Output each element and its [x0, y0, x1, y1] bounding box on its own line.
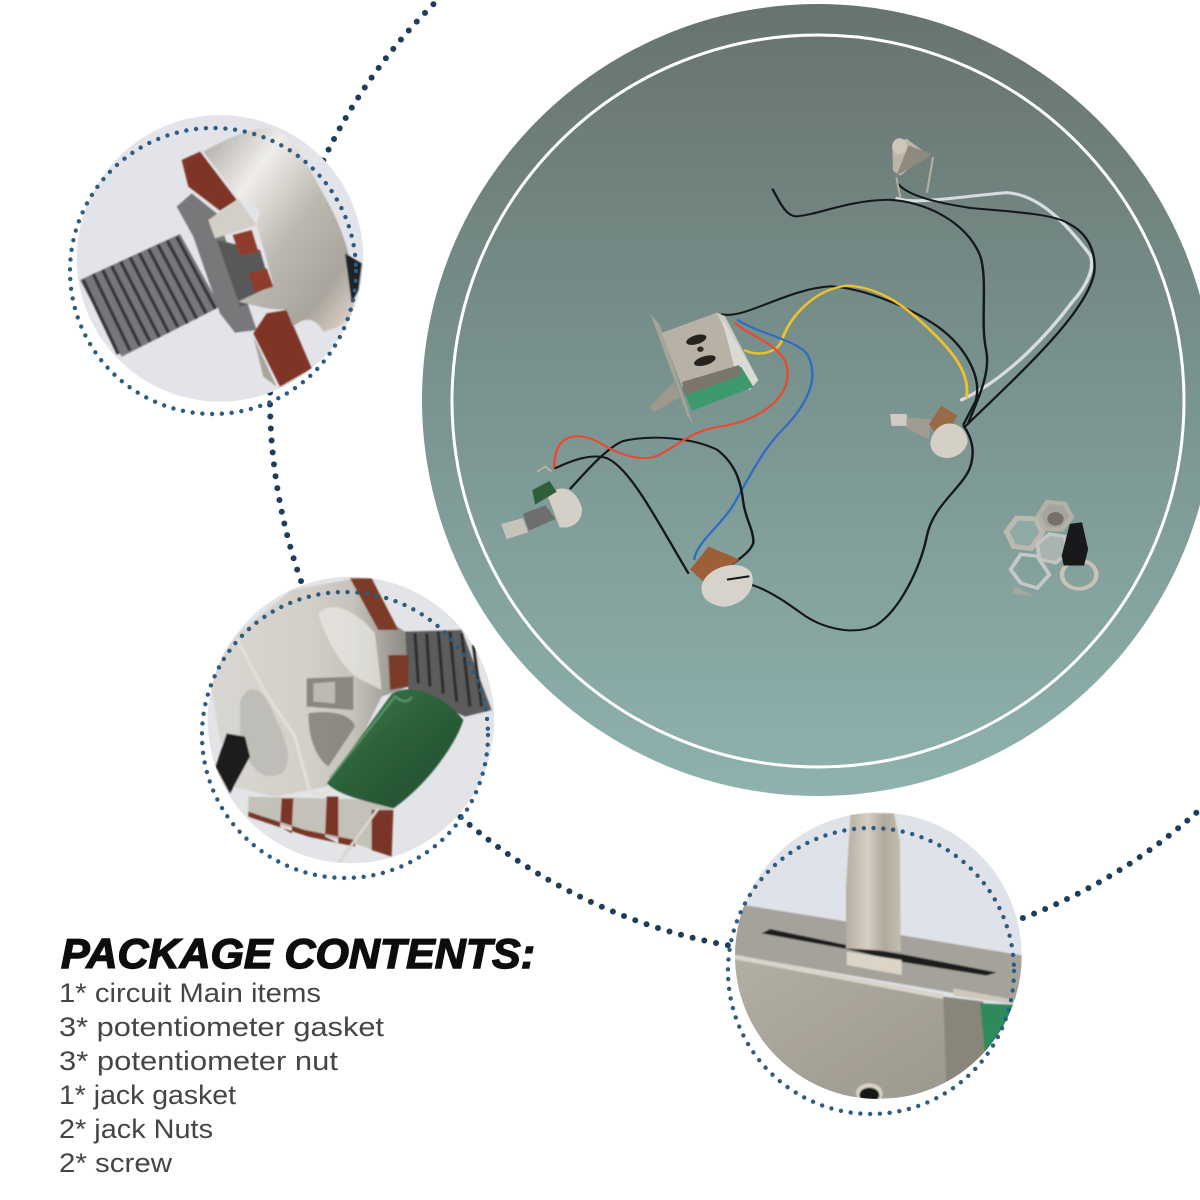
- package contents list: 2* screw: [59, 1148, 173, 1178]
- dotted circle 1: [70, 128, 356, 414]
- dotted circle 3: [728, 828, 1014, 1114]
- switch box face: [733, 955, 950, 1098]
- lead wire: [237, 638, 330, 794]
- icon: tone potentiometer with capacitor: [501, 466, 582, 539]
- main product photo: wiring harness: [501, 138, 1096, 630]
- potentiometer silver can: [203, 128, 355, 332]
- detail photo 3: switch lever: [728, 812, 1023, 1114]
- main product circle: [422, 4, 1200, 796]
- green capacitor: [327, 689, 463, 808]
- potentiometer hex nut: [177, 193, 257, 333]
- icon: output potentiometer: [890, 406, 968, 458]
- icon: volume potentiometer: [690, 547, 753, 607]
- icon: hardware nuts, washers and knob: [1007, 502, 1096, 597]
- potentiometer threaded shaft: [80, 234, 220, 357]
- package contents list: 3* potentiometer gasket: [59, 1012, 385, 1042]
- package contents list: 1* jack gasket: [59, 1080, 237, 1110]
- wires: [554, 184, 1095, 630]
- switch mounting hole: [855, 1082, 884, 1099]
- dotted circle 2: [202, 592, 488, 878]
- package contents list: 3* potentiometer nut: [59, 1046, 339, 1076]
- potentiometer clamp tab: [208, 199, 257, 238]
- capacitor lower terminals: [248, 797, 392, 857]
- switch top plate: [733, 903, 1023, 1005]
- icon: output jack: [892, 138, 933, 198]
- package contents list: 2* jack Nuts: [59, 1114, 213, 1144]
- heading: PACKAGE CONTENTS:: [61, 930, 535, 977]
- potentiometer upper board: [182, 152, 237, 211]
- potentiometer slot: [307, 677, 353, 710]
- detail photo 2: potentiometer and capacitor: [202, 577, 494, 878]
- package contents list: [59, 978, 385, 1178]
- capacitor thread shaft: [405, 630, 492, 717]
- detail photo 1: potentiometer shaft: [70, 115, 363, 414]
- potentiometer lower board: [253, 310, 312, 387]
- solder blob: [240, 689, 288, 776]
- connecting dotted ring: [270, 0, 1200, 954]
- switch lever: [846, 813, 901, 952]
- potentiometer body: [208, 578, 408, 797]
- package contents list: 1* circuit Main items: [59, 978, 321, 1008]
- icon: pickup selector switch: [649, 313, 758, 424]
- switch slot: [762, 929, 997, 976]
